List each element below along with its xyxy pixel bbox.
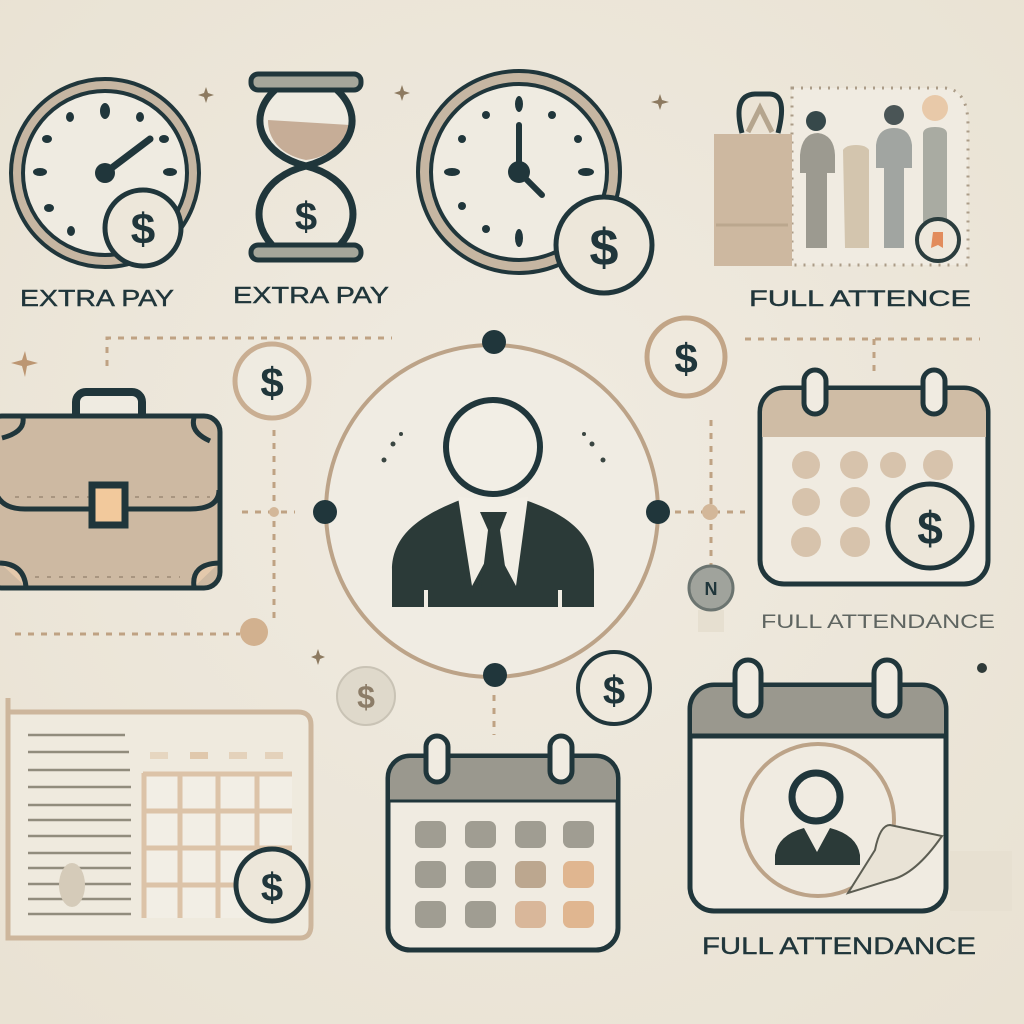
small grey badge	[689, 566, 733, 632]
badge	[917, 219, 959, 261]
dot connector node	[240, 618, 268, 646]
coin: $	[590, 219, 619, 277]
coin	[888, 484, 972, 568]
faded patch	[950, 851, 1012, 911]
connector nodes	[269, 504, 718, 520]
faded coin	[337, 667, 395, 725]
coin	[236, 849, 308, 921]
calendar with coin, right	[760, 370, 988, 584]
hourglass	[251, 74, 361, 260]
coin: $	[131, 205, 155, 254]
coin	[105, 190, 181, 266]
small grey badge: N	[704, 579, 718, 599]
briefcase	[0, 392, 220, 588]
hourglass: $	[295, 195, 317, 239]
label: extra pay 2: EXTRA PAY	[233, 282, 389, 308]
people	[800, 95, 948, 248]
coin right of hub	[647, 318, 725, 396]
employee figure	[392, 400, 594, 607]
coin: $	[917, 502, 943, 554]
label: full attendance middle: FULL ATTENDANCE	[761, 612, 995, 633]
faded coin: $	[357, 679, 375, 715]
central employee hub	[313, 330, 670, 687]
coin left of hub	[235, 344, 309, 418]
coin	[556, 197, 652, 293]
sparkle decorations	[11, 85, 987, 673]
coin left of hub: $	[260, 359, 284, 406]
clock with coin, centre	[418, 71, 652, 293]
label: full attendance bottom: FULL ATTENDANCE	[702, 933, 976, 960]
attendance group panel	[714, 88, 968, 266]
coin right of hub: $	[674, 335, 698, 382]
calendar with person	[690, 660, 946, 911]
clasp	[92, 485, 125, 525]
coin above calendar	[578, 652, 650, 724]
connector lines	[15, 338, 980, 735]
timesheet table	[8, 698, 311, 938]
clock with coin, left	[11, 79, 199, 267]
coin: $	[261, 866, 283, 910]
label: extra pay 1: EXTRA PAY	[20, 285, 174, 311]
coin above calendar: $	[603, 669, 625, 713]
calendar, bottom centre	[388, 736, 618, 950]
label: full attendance top: FULL ATTENCE	[749, 286, 971, 311]
